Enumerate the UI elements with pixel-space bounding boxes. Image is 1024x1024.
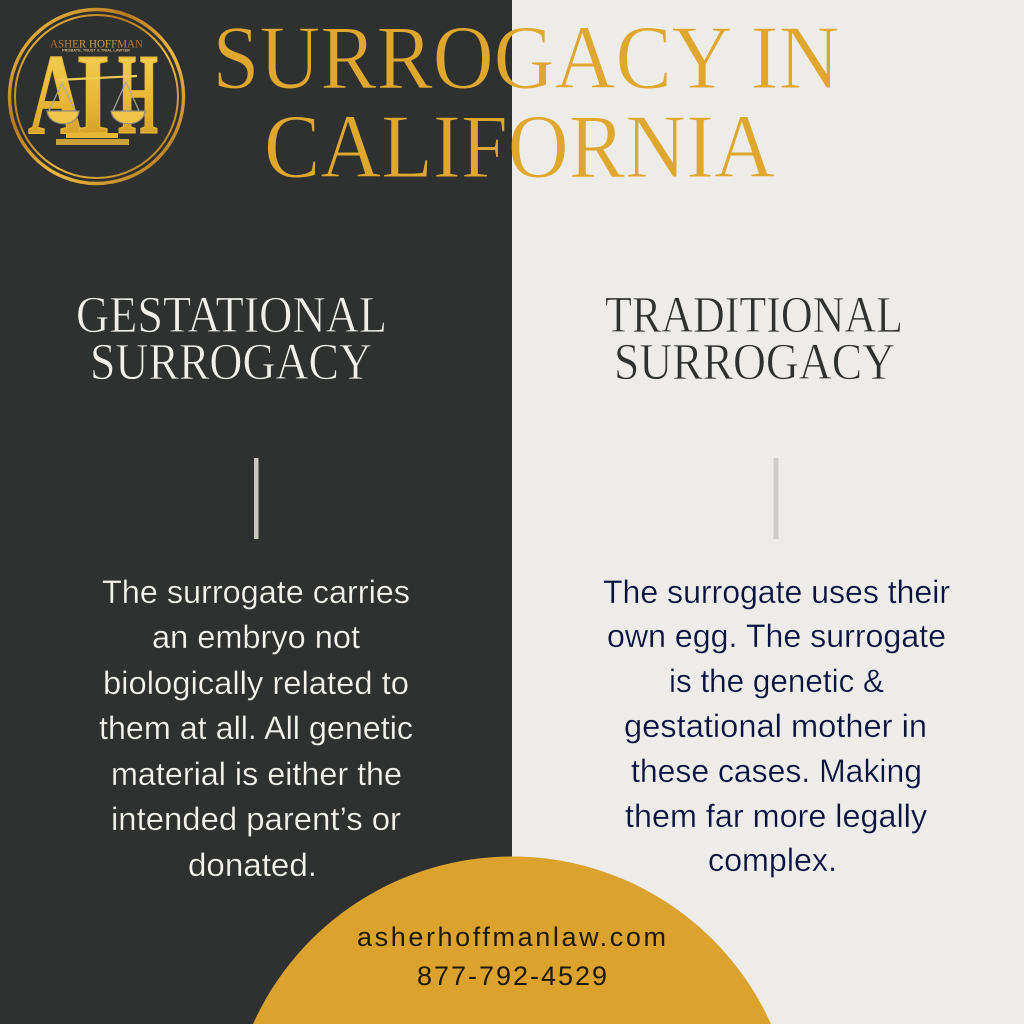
text block: traditional description: these cases. Making xyxy=(631,753,922,789)
text block: traditional description: them far more legally xyxy=(625,798,927,834)
text block: traditional description: gestational mother in xyxy=(624,708,927,744)
heading: traditional surrogacy: TRADITIONAL xyxy=(605,287,903,344)
panel: dark left background xyxy=(0,0,512,1024)
panel: light right background xyxy=(512,0,1024,1024)
heading: traditional surrogacy: SURROGACY xyxy=(614,334,895,391)
heading: gestational surrogacy: SURROGACY xyxy=(90,334,372,391)
heading: gestational surrogacy: GESTATIONAL xyxy=(76,287,387,344)
title: CALIFORNIA xyxy=(264,96,775,197)
text block: gestational description: an embryo not xyxy=(152,619,360,655)
text block: gestational description xyxy=(99,574,413,883)
text block: gestational description: material is either the xyxy=(111,756,402,792)
logo: Asher Hoffman emblem: ASHER HOFFMAN xyxy=(50,38,144,50)
logo: Asher Hoffman emblem: H xyxy=(118,31,158,159)
title xyxy=(212,7,840,197)
logo: Asher Hoffman emblem: I xyxy=(76,31,110,159)
text block: traditional description: own egg. The surrogate xyxy=(607,618,946,654)
text block: gestational description: them at all. All genetic xyxy=(99,710,413,746)
text block: gestational description: donated. xyxy=(188,847,317,883)
text block: traditional description: The surrogate uses their xyxy=(603,574,950,610)
heading: traditional surrogacy xyxy=(605,287,903,391)
footer semicircle with contact details: asherhoffmanlaw.com xyxy=(357,922,666,952)
title: SURROGACY IN xyxy=(212,7,840,108)
divider: right column xyxy=(774,458,778,539)
footer semicircle with contact details: 877-792-4529 xyxy=(417,961,607,991)
text block: traditional description: complex. xyxy=(708,842,837,878)
logo: Asher Hoffman emblem: PROBATE, TRUST & TRIAL LAWYER xyxy=(62,48,131,52)
logo: Asher Hoffman emblem: A xyxy=(28,31,84,159)
text block: gestational description: The surrogate carries xyxy=(102,574,410,610)
heading: gestational surrogacy xyxy=(76,287,387,391)
text block: gestational description: intended parent’s or xyxy=(111,801,401,837)
text block: traditional description: is the genetic & xyxy=(669,663,884,699)
text block: gestational description: biologically related to xyxy=(103,665,409,701)
footer semicircle with contact details xyxy=(253,857,771,1024)
text block: traditional description xyxy=(603,574,950,878)
logo: Asher Hoffman emblem xyxy=(10,10,184,184)
divider: left column xyxy=(254,458,258,539)
